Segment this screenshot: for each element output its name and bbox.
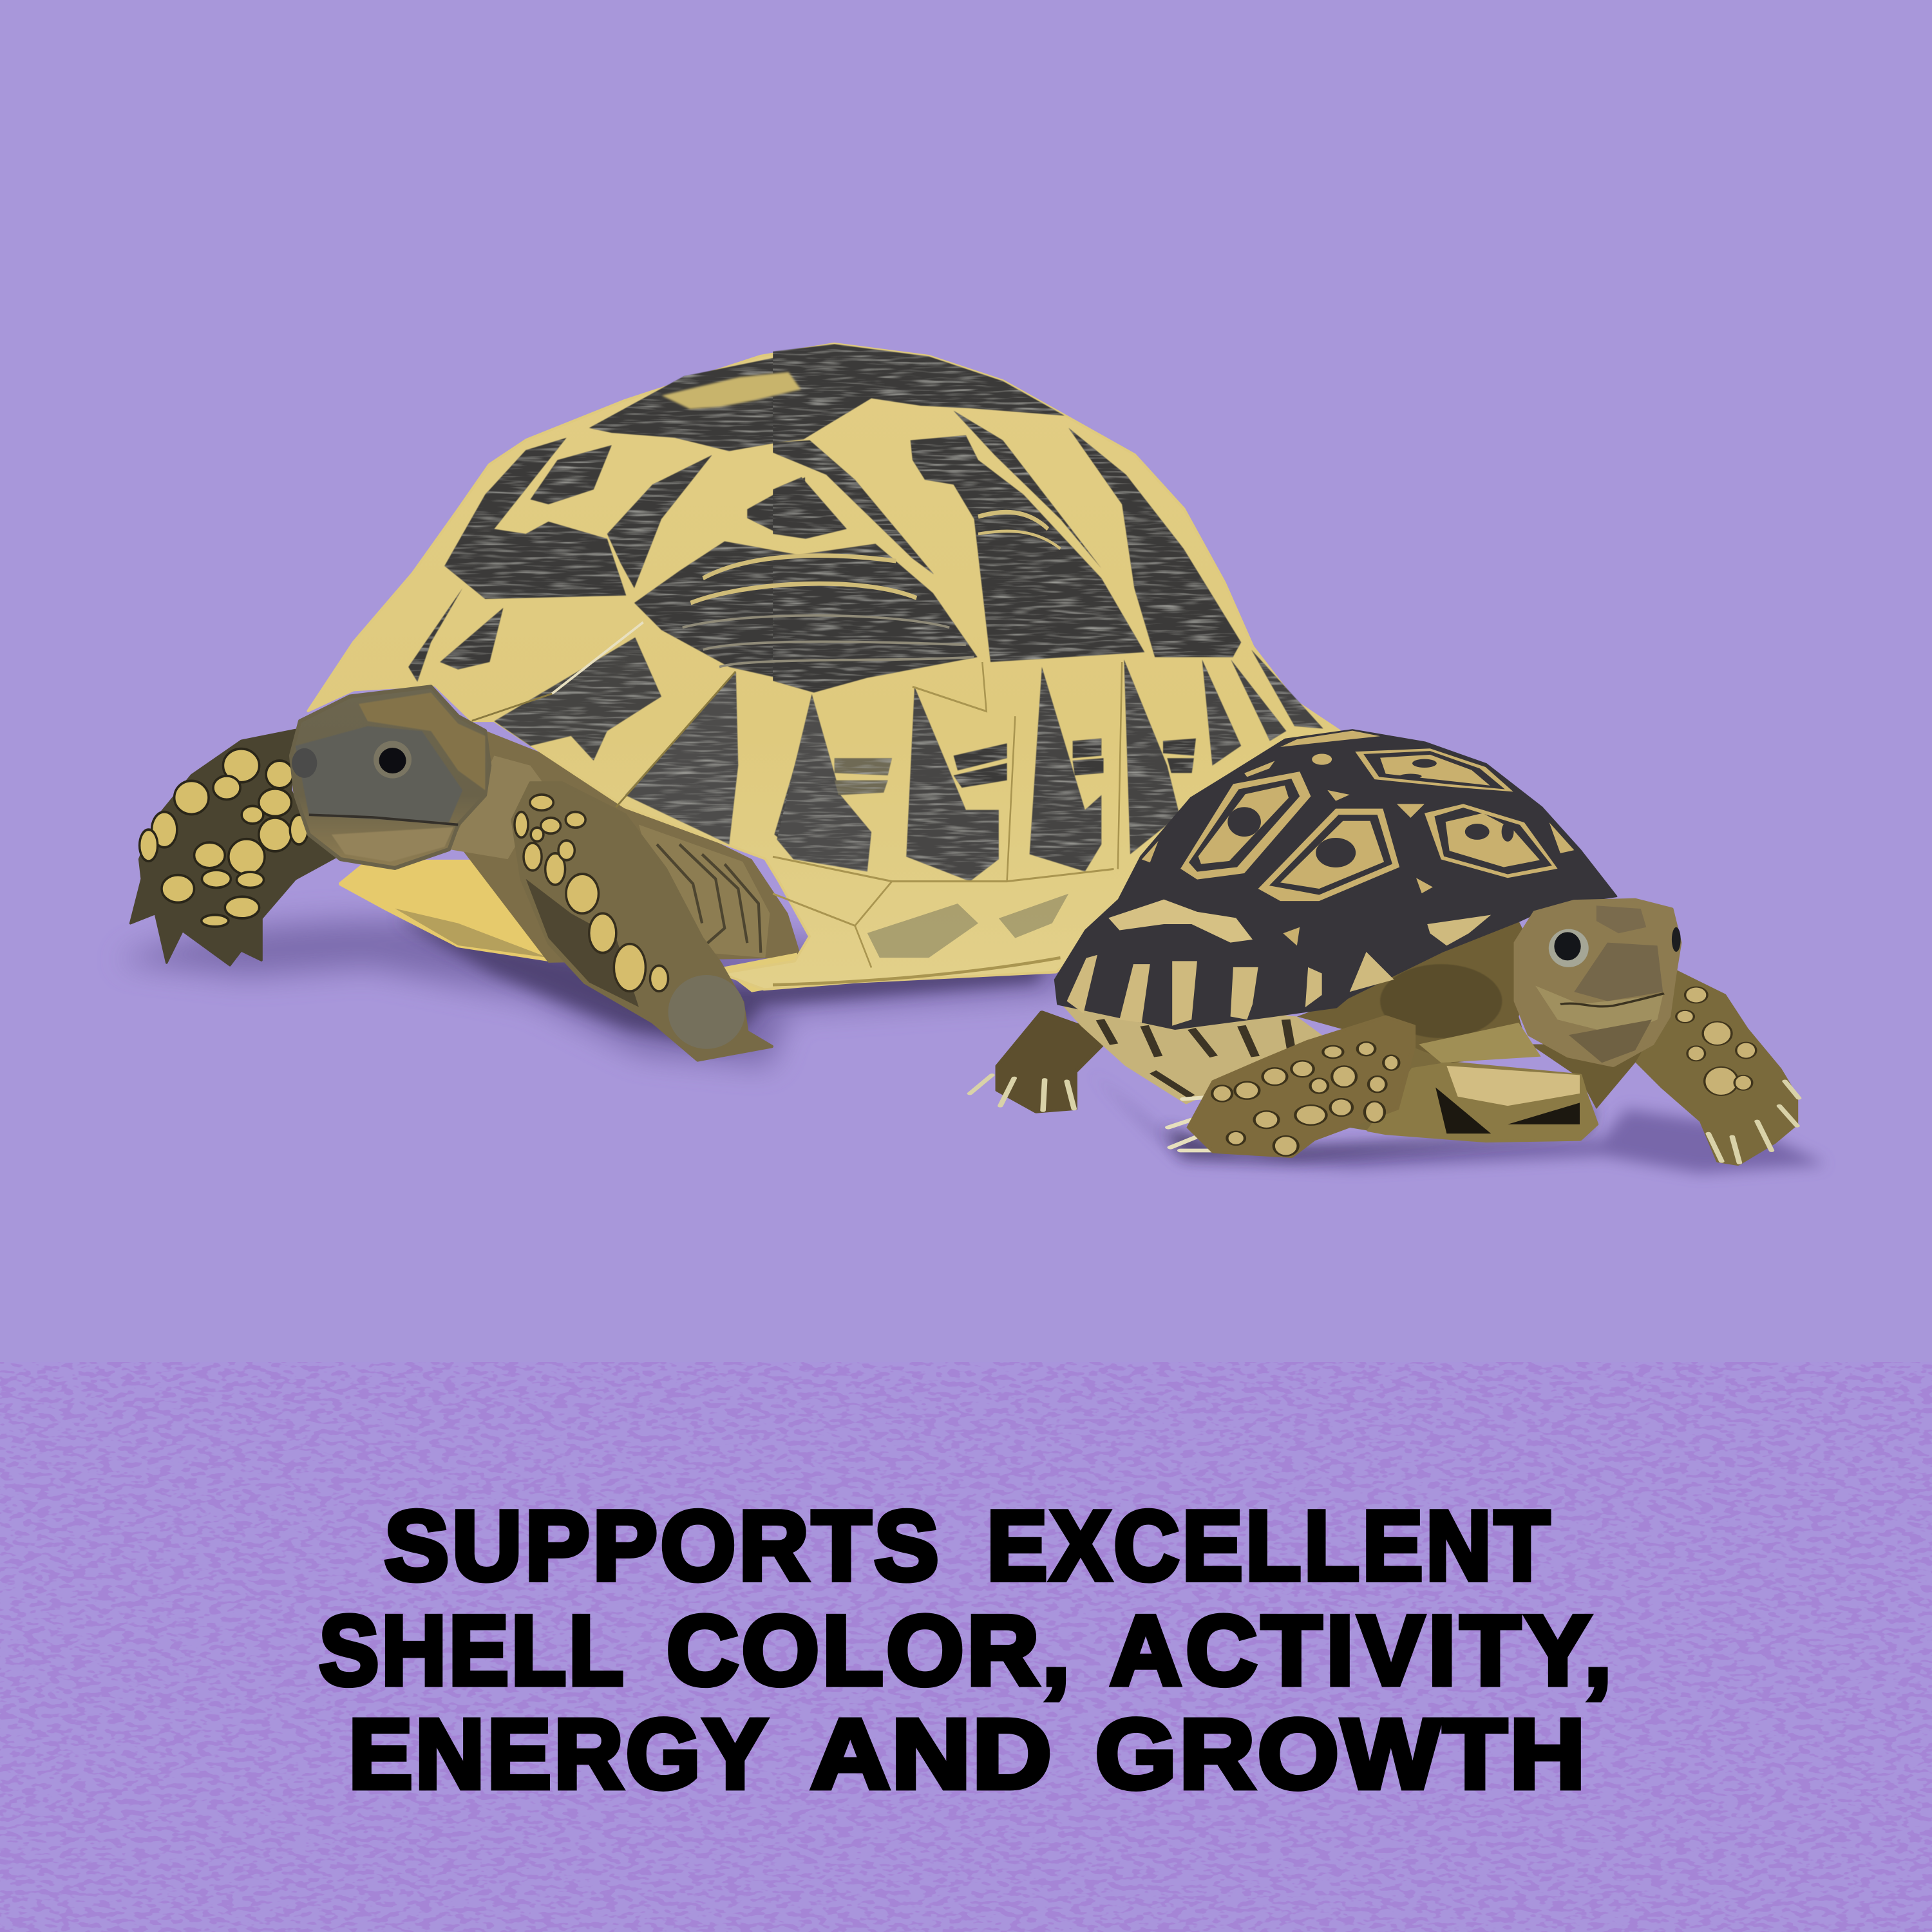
- body fill under head: [1331, 1029, 1646, 1133]
- front left leg: [131, 730, 336, 965]
- carapace base: [308, 344, 1340, 989]
- headline: AND: [811, 1700, 1052, 1809]
- carapace light accents: [1108, 731, 1574, 945]
- headline: ENERGY: [348, 1699, 767, 1809]
- headline: SUPPORTS: [384, 1491, 939, 1601]
- large tortoise: [131, 344, 1340, 1060]
- cream lower shell: [1059, 1001, 1331, 1104]
- ground shadow: small tortoise: [1090, 1072, 1826, 1173]
- head: [1516, 900, 1681, 1066]
- scute centre: [1258, 809, 1399, 901]
- rear right leg: [1635, 971, 1799, 1164]
- headline: GROWTH: [1095, 1699, 1585, 1809]
- ground shadow: large tortoise: [117, 918, 1084, 1066]
- dark scute markings, front: [408, 352, 805, 859]
- rear left leg: [970, 1012, 1103, 1112]
- scute right: [1425, 804, 1558, 878]
- scute top: [1355, 748, 1513, 791]
- textured band: [0, 1362, 1932, 1932]
- headline: EXCELLENT: [987, 1491, 1549, 1601]
- plastron: [341, 862, 553, 960]
- front right leg: [512, 782, 772, 1060]
- background: [0, 0, 1932, 1363]
- carapace: [1056, 730, 1616, 1029]
- neck: [449, 755, 549, 859]
- headline: [319, 1491, 1612, 1809]
- head: [291, 687, 489, 868]
- marginal scutes: [1067, 915, 1491, 1026]
- headline: ACTIVITY,: [1110, 1595, 1612, 1705]
- dark scute markings, rear: [773, 344, 1323, 882]
- front plate seams: [472, 622, 735, 807]
- shell arcs, plate seams and faded patches: [683, 512, 1122, 985]
- plastron: [1369, 1063, 1596, 1141]
- small tortoise: [970, 730, 1799, 1164]
- body skin: [1297, 921, 1541, 1063]
- headline: SHELL: [319, 1595, 623, 1705]
- scute left: [1180, 772, 1311, 880]
- headline: COLOR,: [667, 1595, 1070, 1705]
- yellow blotch on top scute: [661, 372, 801, 409]
- front right leg: [1168, 1016, 1414, 1157]
- body skin under shell: [449, 716, 805, 992]
